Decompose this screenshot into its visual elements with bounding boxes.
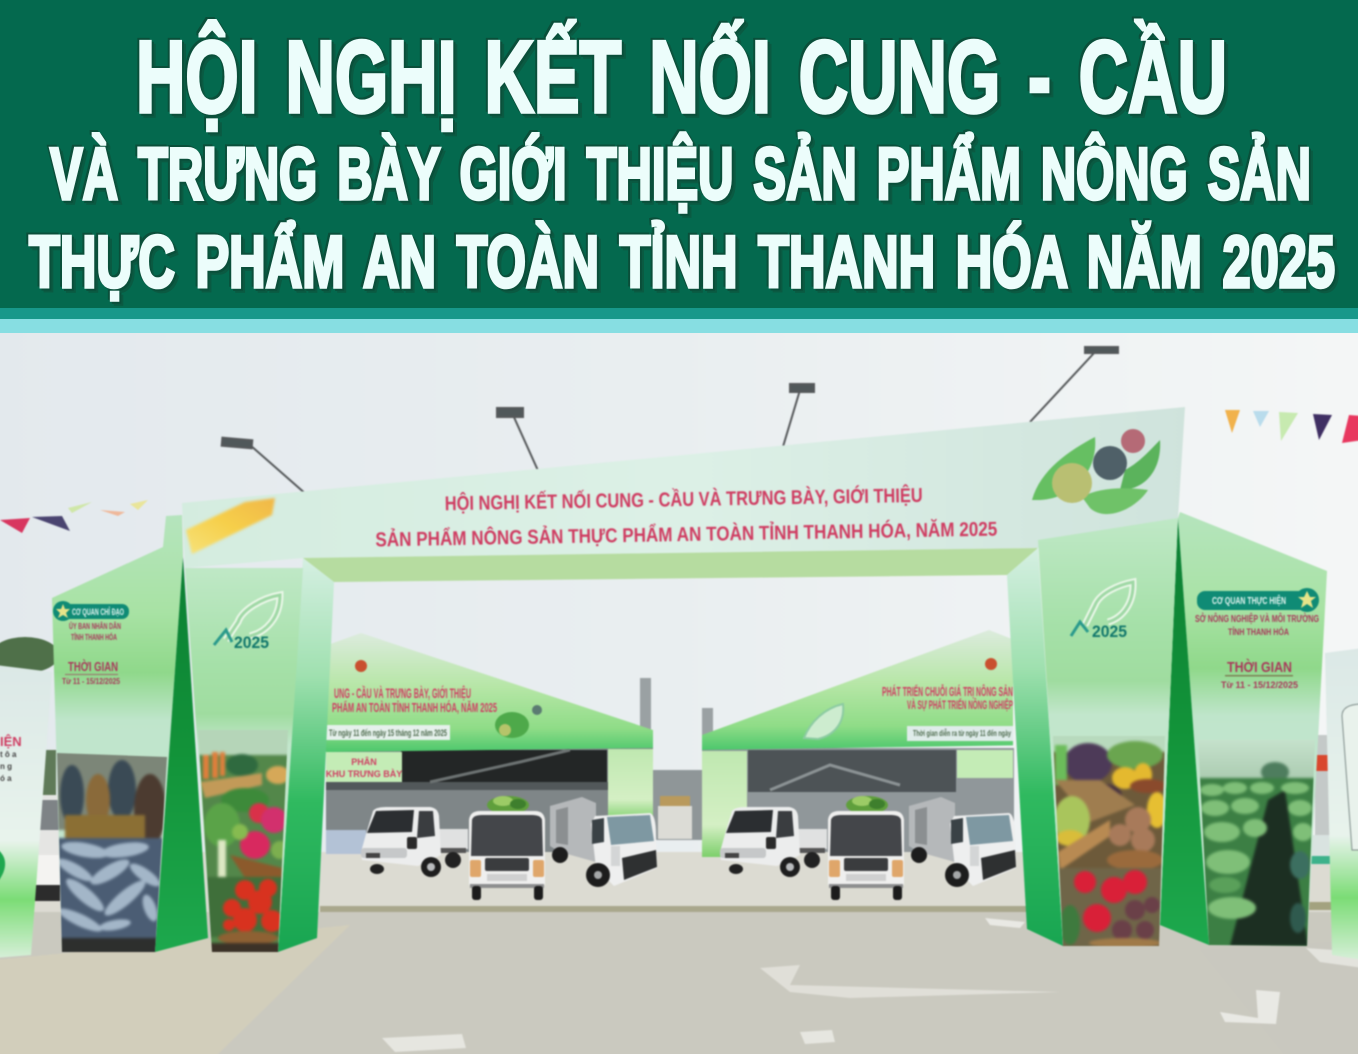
organiser name: TỈNH THANH HÓA <box>71 633 117 642</box>
2025 logo right <box>1071 582 1133 641</box>
implementing agency pill: CƠ QUAN THỰC HIỆN <box>1212 594 1286 607</box>
implementing agency pill <box>1197 588 1319 612</box>
zone sign <box>326 752 402 782</box>
far left panel: n g <box>0 762 12 771</box>
far left panel: t ô a <box>0 750 17 759</box>
left tent <box>300 633 653 854</box>
bunting flags <box>0 410 1358 533</box>
time label <box>1221 658 1298 690</box>
2025 logo left <box>214 595 280 652</box>
title <box>29 20 1335 303</box>
photo: produce right <box>1052 736 1166 947</box>
time label: THỜI GIAN <box>1227 658 1292 676</box>
leaf logo <box>495 705 542 738</box>
leaf emblem <box>1032 429 1160 514</box>
photo: produce left <box>198 730 288 953</box>
2025 logo left: 2025 <box>234 633 269 652</box>
organiser name <box>69 622 121 642</box>
tent interior <box>326 748 653 852</box>
yellow accent <box>186 498 275 554</box>
photo: exhibition gate scene <box>0 325 1358 1054</box>
agency name <box>1195 612 1319 637</box>
light poles <box>222 347 1118 495</box>
right wedge <box>1160 518 1209 945</box>
ground <box>0 852 1358 1054</box>
tent text: PHẨM AN TOÀN TỈNH THANH HÓA, NĂM 2025 <box>332 700 497 715</box>
right wing <box>1178 512 1327 953</box>
time label: THỜI GIAN <box>68 659 118 674</box>
organiser pill: CƠ QUAN CHỈ ĐẠO <box>72 606 124 617</box>
tent text: PHÁT TRIỂN CHUỖI GIÁ TRỊ NÔNG SẢN <box>882 684 1013 699</box>
beam heading: SẢN PHẨM NÔNG SẢN THỰC PHẨM AN TOÀN TỈNH THANH HÓA, NĂM 2025 <box>375 517 997 551</box>
background building <box>1310 735 1358 864</box>
time label: Từ 11 - 15/12/2025 <box>62 677 120 686</box>
zone sign <box>957 750 1013 778</box>
national emblem <box>985 658 997 670</box>
left column side <box>278 558 334 952</box>
organiser pill <box>53 601 129 621</box>
beam heading <box>375 482 997 551</box>
tent interior <box>702 748 1014 852</box>
zone sign: KHU TRƯNG BÀY <box>326 769 402 779</box>
beam heading: HỘI NGHỊ KẾT NỐI CUNG - CẦU VÀ TRƯNG BÀY, GIỚI THIỆU <box>445 483 923 515</box>
time label <box>62 659 120 686</box>
agency name: TỈNH THANH HÓA <box>1228 626 1289 637</box>
gate <box>50 407 1327 960</box>
far left panel <box>0 665 52 958</box>
background trees <box>0 637 59 800</box>
side pillar <box>702 751 747 857</box>
tent text <box>332 684 497 715</box>
date banner: Thời gian diễn ra từ ngày 11 đến ngày <box>913 729 1011 738</box>
left column front <box>185 568 303 952</box>
date banner <box>907 726 1013 741</box>
tent text <box>882 684 1013 712</box>
header banner <box>0 0 1358 333</box>
2025 logo right: 2025 <box>1092 622 1127 641</box>
right column front <box>1038 518 1178 946</box>
side pillar <box>608 749 653 821</box>
parked car <box>34 795 62 901</box>
truss towers <box>640 678 713 840</box>
photo: fishermen with catch <box>56 752 168 953</box>
right tent <box>702 630 1040 857</box>
sky <box>0 325 1358 895</box>
date banner: Từ ngày 11 đến ngày 15 tháng 12 năm 2025 <box>329 728 447 738</box>
zone sign: PHÂN <box>351 756 377 767</box>
leaf logo <box>804 704 843 739</box>
tent roof <box>702 630 1040 750</box>
right column side <box>1007 548 1063 946</box>
far left panel: IỆN <box>0 734 22 749</box>
top beam <box>182 407 1185 568</box>
trucks left group <box>361 796 657 900</box>
far right panel <box>1325 648 1358 960</box>
trucks right group <box>720 796 1016 900</box>
beam underside <box>303 548 1038 582</box>
far left panel: ó a <box>0 774 12 783</box>
date banner <box>326 725 450 740</box>
time label: Từ 11 - 15/12/2025 <box>1221 680 1298 690</box>
photo: vegetable field <box>1199 748 1314 947</box>
tent text: VÀ SỰ PHÁT TRIỂN NÔNG NGHIỆP <box>907 697 1013 712</box>
tent text: UNG - CẦU VÀ TRƯNG BÀY, GIỚI THIỆU <box>334 684 471 701</box>
left wing <box>50 515 183 958</box>
left wedge <box>155 557 208 952</box>
tent roof <box>300 633 653 752</box>
national emblem <box>355 660 367 672</box>
organiser name: ỦY BAN NHÂN DÂN <box>69 622 121 631</box>
